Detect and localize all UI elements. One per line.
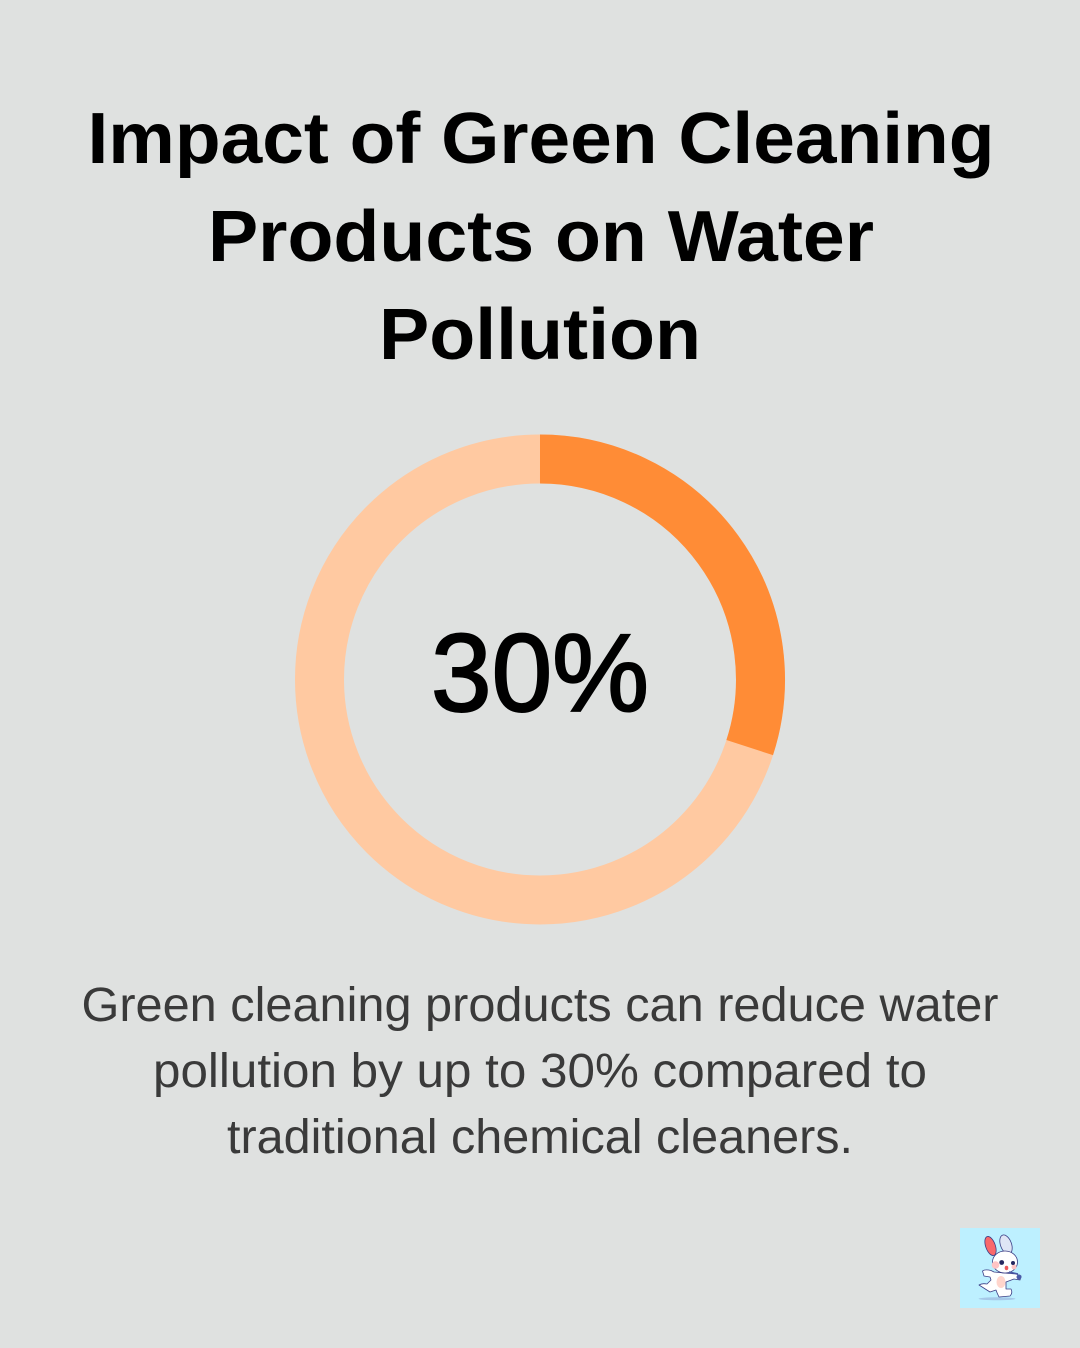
title	[88, 99, 995, 375]
donut value: 30%	[431, 612, 649, 735]
description text: Green cleaning products can reduce water	[82, 979, 999, 1032]
description text	[82, 979, 999, 1164]
description text: pollution by up to 30% compared to	[153, 1045, 927, 1098]
title: Impact of Green Cleaning	[88, 99, 995, 179]
donut chart: 30%	[320, 459, 760, 900]
title: Products on Water	[208, 197, 874, 277]
title: Pollution	[379, 295, 701, 375]
description text: traditional chemical cleaners.	[227, 1111, 853, 1164]
icon: bunny logo	[960, 1228, 1040, 1308]
